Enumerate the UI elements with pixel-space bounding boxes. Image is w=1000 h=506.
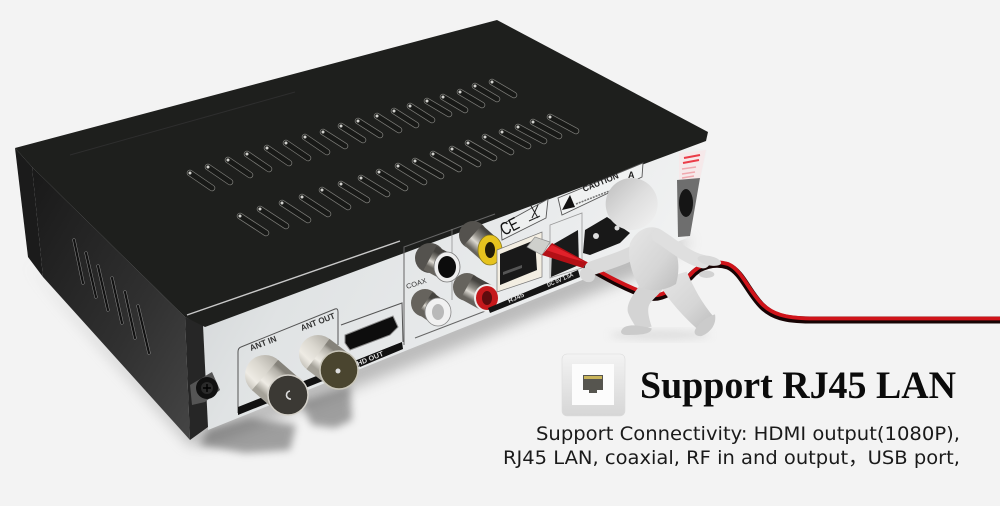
back panel	[185, 147, 707, 440]
COAX label: COAX	[405, 278, 428, 291]
red RCA	[453, 273, 500, 312]
right arm and hand	[658, 236, 722, 278]
DC label: DC 5V 1.5A	[546, 272, 575, 289]
description line 1: Support Connectivity: HDMI output(1080P),	[536, 423, 960, 445]
RJ45 icon tile	[562, 354, 625, 416]
RJ45 port	[488, 232, 580, 313]
ANT OUT label: ANT OUT	[299, 310, 337, 333]
left arm and hand	[577, 248, 642, 285]
weee icon	[529, 205, 540, 221]
DC socket	[550, 213, 582, 278]
right leg and foot	[658, 272, 715, 336]
head	[606, 178, 658, 230]
CE mark plate	[497, 199, 548, 240]
AV panel	[404, 214, 502, 345]
product shadow	[26, 240, 692, 453]
set-top box	[15, 20, 708, 440]
power socket	[583, 217, 630, 255]
ANT IN label: ANT IN	[248, 333, 278, 353]
ethernet cable	[527, 237, 1000, 320]
black RCA	[415, 243, 460, 282]
CE text: CE	[497, 214, 523, 240]
description line 2: RJ45 LAN, coaxial, RF in and output，USB port,	[503, 447, 960, 469]
screw left	[196, 377, 218, 399]
white coaxial RCA	[411, 289, 451, 326]
HD OUT label: HD OUT	[356, 351, 385, 368]
socket glyph	[583, 375, 603, 393]
A mark: A	[628, 170, 635, 180]
top cover with vent slots	[15, 20, 708, 327]
torso	[629, 227, 678, 290]
RJ45 plug	[527, 237, 587, 268]
ANT OUT connector	[299, 335, 358, 389]
RJ45 label: RJ45	[507, 292, 526, 305]
left leg and foot	[621, 278, 665, 335]
3D figure pulling cable	[577, 178, 722, 336]
HDMI output	[341, 303, 403, 368]
sticker	[679, 150, 706, 182]
yellow RCA	[459, 221, 502, 265]
ANT IN connector	[245, 355, 308, 415]
caution plate	[558, 163, 643, 215]
antenna section	[238, 309, 400, 415]
heading: Support RJ45 LAN	[640, 364, 956, 407]
box side panel	[15, 148, 190, 440]
screw right	[677, 178, 700, 237]
caution text: CAUTION	[581, 170, 620, 194]
figure shadow	[610, 330, 710, 340]
